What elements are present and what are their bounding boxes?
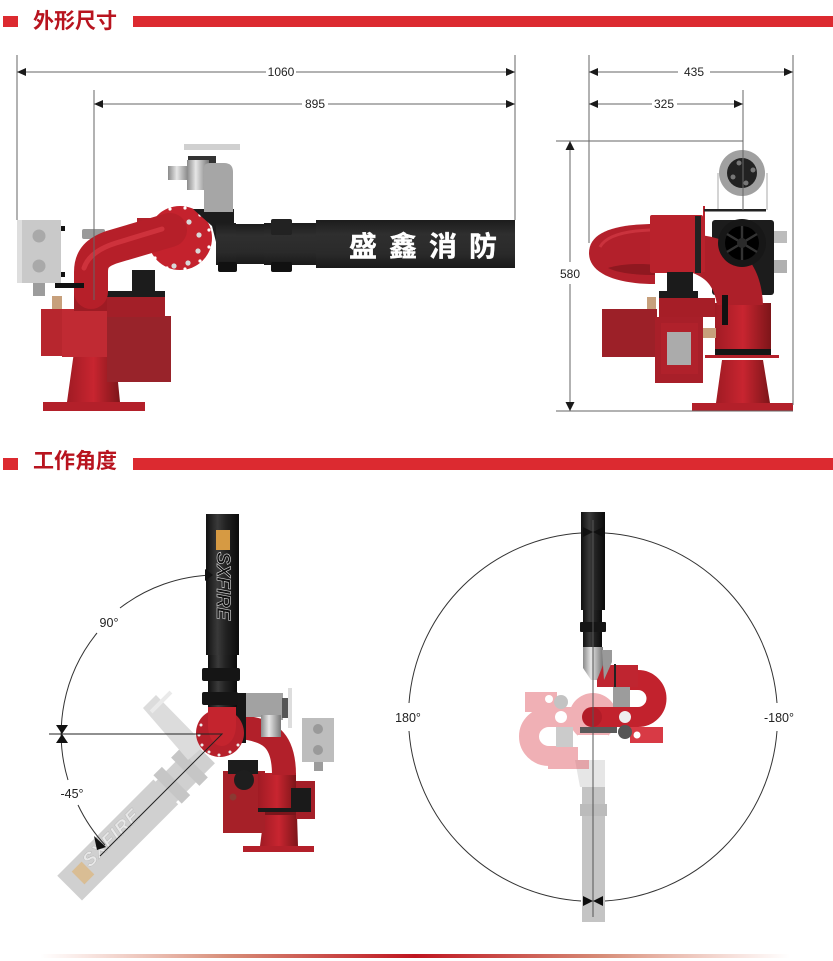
dimension 895: 895: [305, 97, 325, 111]
grey stub connectors: [774, 231, 787, 273]
black band: [258, 808, 296, 812]
ghost bracket: [143, 695, 205, 760]
black bracket: [235, 693, 246, 743]
label 180°: 180°: [395, 711, 421, 725]
ghost barrel lettering: SXFIRE: [79, 805, 145, 872]
base flange: [43, 402, 145, 411]
red neck block: [659, 298, 715, 317]
black neck: [107, 270, 165, 297]
black band: [715, 348, 771, 355]
section header: 外形尺寸: 外形尺寸: [33, 10, 117, 33]
ghost red monitor: [525, 692, 617, 769]
barrel couplings: [216, 219, 317, 272]
elevation angle illustration: [49, 514, 334, 902]
arrowheads: [583, 527, 603, 906]
silver valve and bracket: [245, 688, 292, 737]
red flange with bolts: [148, 206, 212, 271]
ghost lowered barrel: [55, 691, 218, 902]
dimension 580: 580: [560, 267, 580, 281]
dimension 435: 435: [684, 65, 704, 79]
pressure gauge: [619, 711, 631, 723]
red side motor box: [630, 727, 663, 743]
arc -45°: [78, 805, 105, 845]
base cone: [716, 360, 770, 403]
black upper barrel: [580, 512, 606, 648]
grey name plate: [667, 332, 691, 365]
black gear plate: [55, 283, 84, 288]
black raised barrel: [206, 514, 239, 655]
barrel brand lettering: SXFIRE: [212, 552, 233, 621]
red flange with bolts: [196, 709, 244, 757]
black gearbox: [228, 760, 311, 812]
brass fitting: [52, 296, 62, 309]
label 90°: 90°: [100, 616, 118, 630]
red pipe bend: [240, 727, 284, 775]
barrel brand logo mark: [216, 530, 230, 550]
grey nozzle tip disc: [704, 150, 767, 212]
red swivel housing: [650, 206, 705, 273]
red U elbow: [208, 705, 236, 746]
red upper block: [107, 293, 165, 317]
section header: 工作角度: [3, 450, 833, 473]
red rear motor housing: [107, 316, 171, 382]
bottom gradient rule: [40, 954, 790, 958]
arrowheads: [56, 569, 213, 850]
dimension 325: 325: [654, 97, 674, 111]
dimension 1060: 1060: [268, 65, 295, 79]
red bend to cylinder: [690, 235, 763, 305]
arc 90°: [61, 575, 213, 780]
base flange: [243, 846, 314, 852]
black rear square plate: [712, 220, 774, 295]
section header: 工作角度: 工作角度: [33, 450, 117, 473]
flange plate: [253, 812, 303, 815]
red elbow stem: [74, 285, 107, 311]
rotation circle: [409, 533, 777, 901]
grey electric box: [17, 220, 65, 296]
label -180°: -180°: [764, 711, 794, 725]
red U pipe: [582, 664, 657, 727]
black barrel stages: [202, 655, 240, 707]
rear elbow support: [137, 218, 157, 238]
red U pipe: [589, 224, 655, 284]
black nozzle barrel: [316, 220, 515, 268]
barrel lettering: 盛鑫消防: [349, 225, 497, 265]
pressure gauge cap: [82, 229, 105, 239]
label -45°: -45°: [60, 787, 84, 801]
brass fittings: [647, 297, 716, 338]
base flange: [692, 403, 793, 411]
red cylinder: [715, 303, 771, 349]
red front motor housing: [41, 309, 107, 357]
front view monitor illustration: [589, 150, 793, 411]
red motor housing: [602, 309, 703, 383]
horizontal rotation illustration: [395, 512, 794, 922]
base cone: [260, 815, 298, 846]
silver valve body: [583, 647, 603, 680]
red elbow pipe: [84, 229, 170, 292]
vertical black bracket: [193, 209, 234, 242]
grey mount block: [613, 687, 630, 707]
grey electric box: [302, 718, 334, 771]
section header: 外形尺寸: [3, 10, 833, 33]
red rear housing: [223, 771, 265, 833]
dimension lines: [17, 55, 793, 411]
reference line horizontal: [49, 734, 222, 856]
black gear: [722, 295, 728, 325]
red side housing: [296, 781, 315, 819]
ghost barrel lower: [575, 760, 607, 922]
flange plate: [705, 355, 779, 358]
grey valve bracket: [168, 144, 240, 212]
base cone: [67, 352, 120, 402]
white hub gap: [578, 735, 608, 760]
red cylinder: [258, 773, 296, 809]
black neck and bar: [659, 272, 698, 298]
side bracket: [602, 650, 612, 680]
center axis line: [592, 520, 594, 917]
ghost logo mark: [72, 862, 94, 884]
black nozzle opening: [718, 219, 766, 267]
gear and plate: [580, 725, 640, 739]
side view monitor illustration: [17, 144, 515, 411]
